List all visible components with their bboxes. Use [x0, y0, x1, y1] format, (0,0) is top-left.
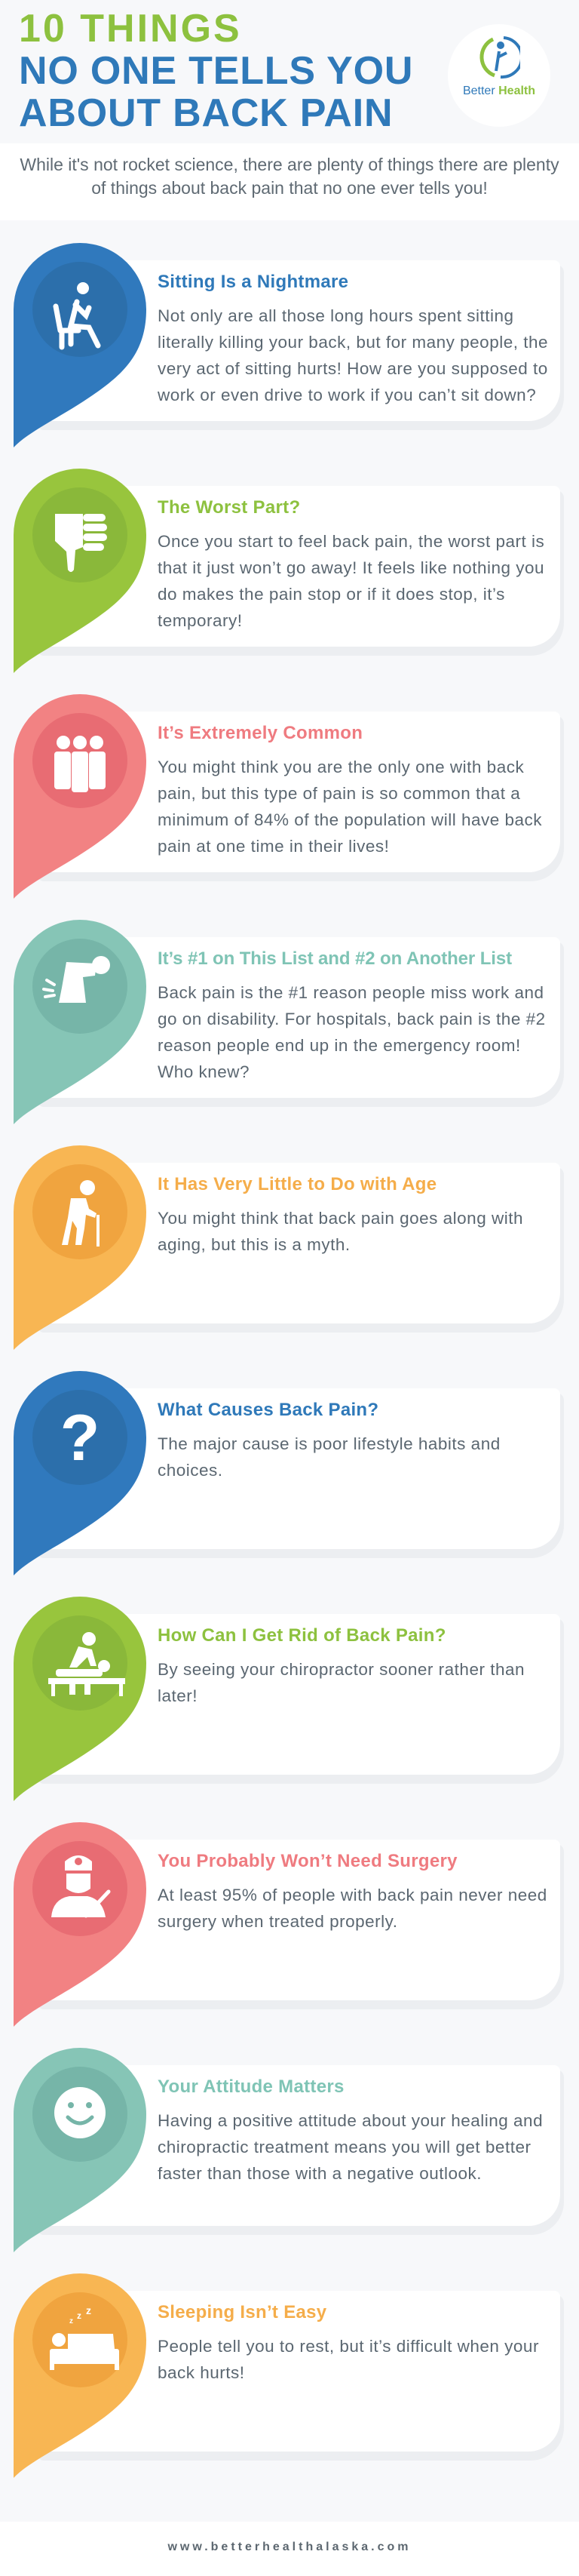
- heading: It’s Extremely Common: [158, 723, 363, 743]
- text: Back pain is the #1 reason people miss work and: [158, 983, 544, 1002]
- title: [19, 7, 413, 135]
- panel: get rid: [14, 1597, 564, 1801]
- text: [158, 983, 546, 1081]
- text: At least 95% of people with back pain never need: [158, 1886, 547, 1904]
- heading: Sleeping Isn’t Easy: [158, 2302, 326, 2322]
- panel: sleeping: [14, 2273, 564, 2478]
- icon: surgeon pin: [14, 1822, 146, 2027]
- text: literally killing your back, but for many people, the: [158, 333, 548, 352]
- icon: chiropractor pin: [14, 1597, 146, 1801]
- icon: question pin: ?: [60, 1402, 100, 1474]
- text: Having a positive attitude about your healing and: [158, 2111, 543, 2130]
- heading: The Worst Part?: [158, 497, 300, 518]
- text: Who knew?: [158, 1062, 250, 1081]
- heading: It Has Very Little to Do with Age: [158, 1174, 437, 1194]
- icon: bed pin: [14, 2273, 146, 2478]
- text: chiropractic treatment means you will get better: [158, 2138, 531, 2156]
- panel: age: [14, 1145, 564, 1350]
- text: [158, 1434, 501, 1480]
- heading: You Probably Won’t Need Surgery: [158, 1851, 458, 1871]
- icon: thumbs down pin: [14, 469, 146, 673]
- icon: bed pin: z: [86, 2304, 91, 2316]
- logo: [448, 24, 550, 127]
- icon: question pin: [14, 1371, 146, 1575]
- text: faster than those with a negative outlook.: [158, 2164, 482, 2183]
- panel: #1 on list: [14, 920, 564, 1124]
- text: The major cause is poor lifestyle habits and: [158, 1434, 501, 1453]
- heading: Your Attitude Matters: [158, 2076, 345, 2097]
- text: [158, 532, 544, 630]
- text: later!: [158, 1686, 198, 1705]
- text: work or even drive to work if you can’t sit down?: [158, 386, 536, 404]
- text: [158, 1660, 525, 1705]
- intro text: [20, 155, 559, 198]
- text: Once you start to feel back pain, the worst part is: [158, 532, 544, 551]
- text: reason people end up in the emergency room!: [158, 1036, 521, 1055]
- panel: common: [14, 694, 564, 899]
- icon: bed pin: z: [69, 2317, 73, 2325]
- heading: It’s #1 on This List and #2 on Another List: [158, 948, 512, 969]
- text: [158, 2111, 543, 2183]
- title: 10 THINGS: [19, 7, 242, 51]
- icon: sitting person pin: [14, 243, 146, 447]
- text: very act of sitting hurts! How are you supposed to: [158, 359, 548, 378]
- text: You might think you are the only one with back: [158, 758, 524, 776]
- text: do makes the pain stop or if it does stop, it’s: [158, 585, 505, 604]
- text: [158, 2337, 539, 2382]
- text: pain, but this type of pain is so common that a: [158, 784, 520, 803]
- text: surgery when treated properly.: [158, 1912, 398, 1931]
- heading: What Causes Back Pain?: [158, 1400, 378, 1420]
- text: Not only are all those long hours spent sitting: [158, 306, 514, 325]
- text: choices.: [158, 1461, 223, 1480]
- text: minimum of 84% of the population will have back: [158, 810, 542, 829]
- text: that it just won’t go away! It feels like nothing you: [158, 558, 544, 577]
- header band: [0, 0, 579, 143]
- icon: elderly pin: [14, 1145, 146, 1350]
- footer url: www.betterhealthalaska.com: [167, 2541, 412, 2553]
- icon: back pain pin: [14, 920, 146, 1124]
- text: [158, 306, 548, 404]
- panel: surgery: [14, 1822, 564, 2027]
- text: pain at one time in their lives!: [158, 837, 389, 856]
- panel: sitting: [14, 243, 564, 447]
- text: You might think that back pain goes along with: [158, 1209, 523, 1228]
- intro text: While it's not rocket science, there are plenty of things there are plenty: [20, 155, 559, 174]
- text: [158, 758, 542, 856]
- title: NO ONE TELLS YOU: [19, 49, 413, 93]
- text: go on disability. For hospitals, back pain is the #2: [158, 1010, 546, 1028]
- text: [158, 1209, 523, 1254]
- title: ABOUT BACK PAIN: [19, 91, 393, 135]
- text: aging, but this is a myth.: [158, 1235, 351, 1254]
- text: [158, 1886, 547, 1931]
- heading: Sitting Is a Nightmare: [158, 272, 348, 292]
- text: temporary!: [158, 611, 243, 630]
- icon: people pin: [14, 694, 146, 899]
- intro text: of things about back pain that no one ever tells you!: [91, 178, 488, 198]
- panel: causes: [14, 1371, 564, 1575]
- text: back hurts!: [158, 2363, 245, 2382]
- icon: smiley pin: [14, 2048, 146, 2252]
- logo: Better Health: [463, 85, 535, 97]
- heading: How Can I Get Rid of Back Pain?: [158, 1625, 446, 1646]
- panel: worst part: [14, 469, 564, 673]
- text: By seeing your chiropractor sooner rather than: [158, 1660, 525, 1679]
- icon: bed pin: z: [77, 2310, 81, 2321]
- text: People tell you to rest, but it’s difficult when your: [158, 2337, 539, 2356]
- panel: attitude: [14, 2048, 564, 2252]
